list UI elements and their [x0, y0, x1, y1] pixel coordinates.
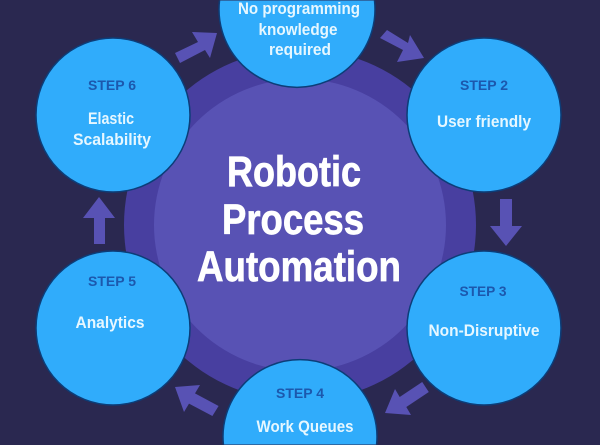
step 3 circle: [407, 251, 561, 405]
step 3 circle: Non-Disruptive: [428, 321, 540, 340]
central inner circle: [154, 79, 446, 371]
step 6 circle: Elastic: [88, 109, 134, 128]
step 5 circle: [36, 251, 190, 405]
step 1 circle: [219, 0, 375, 87]
step 6 circle: [36, 38, 190, 192]
step 3 circle: STEP 3: [460, 283, 507, 299]
step 6 circle: Scalability: [73, 130, 151, 149]
arrow: step 6 to step 1: [175, 32, 217, 63]
step 2 circle: User friendly: [437, 112, 531, 131]
title: Automation: [197, 243, 401, 291]
step 2 circle: [407, 38, 561, 192]
step 4 circle: Work Queues: [256, 417, 354, 436]
arrow: step 3 to step 4: [385, 382, 429, 415]
arrow: step 2 to step 3: [490, 199, 522, 246]
step 1 circle: required: [269, 40, 331, 59]
title: Process: [222, 196, 364, 244]
step 5 circle: STEP 5: [88, 273, 136, 289]
step 6 circle: STEP 6: [88, 77, 136, 93]
step 2 circle: STEP 2: [460, 77, 508, 93]
arrow: step 4 to step 5: [175, 385, 219, 416]
step 5 circle: Analytics: [76, 313, 144, 332]
step 1 circle: knowledge: [258, 20, 338, 39]
arrow: step 5 to step 6: [83, 197, 115, 244]
title: Robotic: [227, 148, 361, 196]
central outer ring: [124, 49, 476, 401]
step 4 circle: STEP 4: [276, 385, 324, 401]
arrow: step 1 to step 2: [380, 30, 424, 62]
step 4 circle: [223, 360, 377, 444]
title: [197, 148, 401, 291]
